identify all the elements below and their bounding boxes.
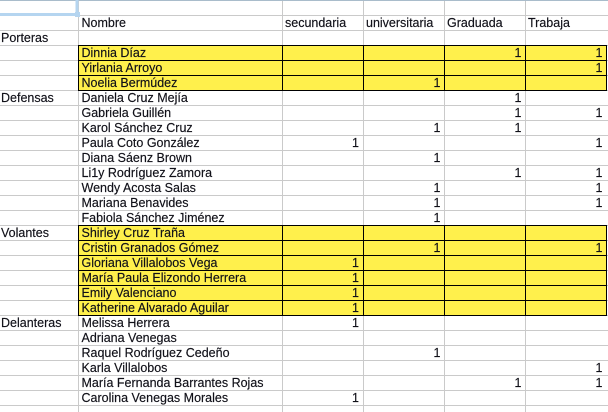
section: Volantes: Katherine Alvarado Aguilar bbox=[82, 301, 229, 315]
section: Delanteras: María Fernanda Barrantes Rojas bbox=[82, 376, 264, 390]
header row: Graduada bbox=[447, 16, 503, 30]
section: Delanteras: Melissa Herrera bbox=[82, 316, 170, 330]
section: Delanteras: Delanteras bbox=[1, 316, 61, 330]
section: Porteras bbox=[1, 31, 606, 90]
section: Defensas: Paula Coto González bbox=[82, 136, 200, 150]
section: Defensas: 1 bbox=[434, 211, 441, 225]
section: Volantes: 1 bbox=[596, 241, 603, 255]
header row: universitaria bbox=[366, 16, 433, 30]
section: Defensas: 1 bbox=[434, 121, 441, 135]
section: Porteras: Yirlania Arroyo bbox=[82, 61, 162, 75]
section: Volantes: Cristin Granados Gómez bbox=[82, 241, 219, 255]
section: Defensas: 1 bbox=[515, 106, 522, 120]
section: Defensas: 1 bbox=[596, 106, 603, 120]
section: Defensas: 1 bbox=[515, 166, 522, 180]
section: Volantes: 1 bbox=[352, 286, 359, 300]
section: Defensas: 1 bbox=[515, 121, 522, 135]
section: Volantes bbox=[1, 226, 606, 316]
section: Porteras: Noelia Bermúdez bbox=[82, 76, 177, 90]
header row bbox=[82, 16, 570, 30]
section: Volantes: Emily Valenciano bbox=[82, 286, 177, 300]
section: Volantes: María Paula Elizondo Herrera bbox=[82, 271, 246, 285]
section: Defensas: Defensas bbox=[1, 91, 54, 105]
section: Delanteras: 1 bbox=[352, 316, 359, 330]
section: Delanteras: 1 bbox=[434, 346, 441, 360]
section: Defensas: Wendy Acosta Salas bbox=[82, 181, 196, 195]
section: Defensas bbox=[1, 91, 603, 225]
header row: Trabaja bbox=[528, 16, 570, 30]
section: Volantes: 1 bbox=[352, 301, 359, 315]
section: Defensas: 1 bbox=[596, 181, 603, 195]
header row: Nombre bbox=[82, 16, 126, 30]
section: Defensas: 1 bbox=[596, 166, 603, 180]
section: Porteras: 1 bbox=[596, 46, 603, 60]
section: Volantes: 1 bbox=[352, 256, 359, 270]
header row: secundaria bbox=[285, 16, 346, 30]
section: Porteras: Dinnia Díaz bbox=[82, 46, 146, 60]
section: Delanteras: Karla Villalobos bbox=[82, 361, 167, 375]
section: Volantes: Gloriana Villalobos Vega bbox=[82, 256, 218, 270]
section: Defensas: Gabriela Guillén bbox=[82, 106, 171, 120]
section: Delanteras: 1 bbox=[515, 376, 522, 390]
section: Defensas: Fabiola Sánchez Jiménez bbox=[82, 211, 225, 225]
section: Delanteras: 1 bbox=[596, 376, 603, 390]
section: Volantes: 1 bbox=[352, 271, 359, 285]
section: Defensas: Li1y Rodríguez Zamora bbox=[82, 166, 212, 180]
section: Delanteras: 1 bbox=[352, 391, 359, 405]
section: Defensas: 1 bbox=[596, 136, 603, 150]
section: Defensas: 1 bbox=[434, 196, 441, 210]
section: Delanteras: Carolina Venegas Morales bbox=[82, 391, 228, 405]
section: Defensas: 1 bbox=[352, 136, 359, 150]
section: Delanteras: Adriana Venegas bbox=[82, 331, 177, 345]
section: Porteras: 1 bbox=[434, 76, 441, 90]
section: Defensas: Daniela Cruz Mejía bbox=[82, 91, 188, 105]
section: Porteras: 1 bbox=[596, 61, 603, 75]
section: Defensas: 1 bbox=[596, 196, 603, 210]
section: Porteras: 1 bbox=[515, 46, 522, 60]
section: Delanteras: 1 bbox=[596, 361, 603, 375]
selected cell bbox=[0, 0, 80, 17]
section: Defensas: 1 bbox=[434, 181, 441, 195]
section: Delanteras bbox=[1, 316, 603, 405]
section: Defensas: Diana Sáenz Brown bbox=[82, 151, 192, 165]
section: Volantes: 1 bbox=[434, 241, 441, 255]
section: Defensas: Karol Sánchez Cruz bbox=[82, 121, 193, 135]
section: Volantes: Volantes bbox=[1, 226, 49, 240]
section: Defensas: 1 bbox=[434, 151, 441, 165]
section: Defensas: 1 bbox=[515, 91, 522, 105]
section: Delanteras: Raquel Rodríguez Cedeño bbox=[82, 346, 230, 360]
section: Porteras: Porteras bbox=[1, 31, 48, 45]
section: Defensas: Mariana Benavides bbox=[82, 196, 189, 210]
section: Volantes: Shirley Cruz Traña bbox=[82, 226, 185, 240]
